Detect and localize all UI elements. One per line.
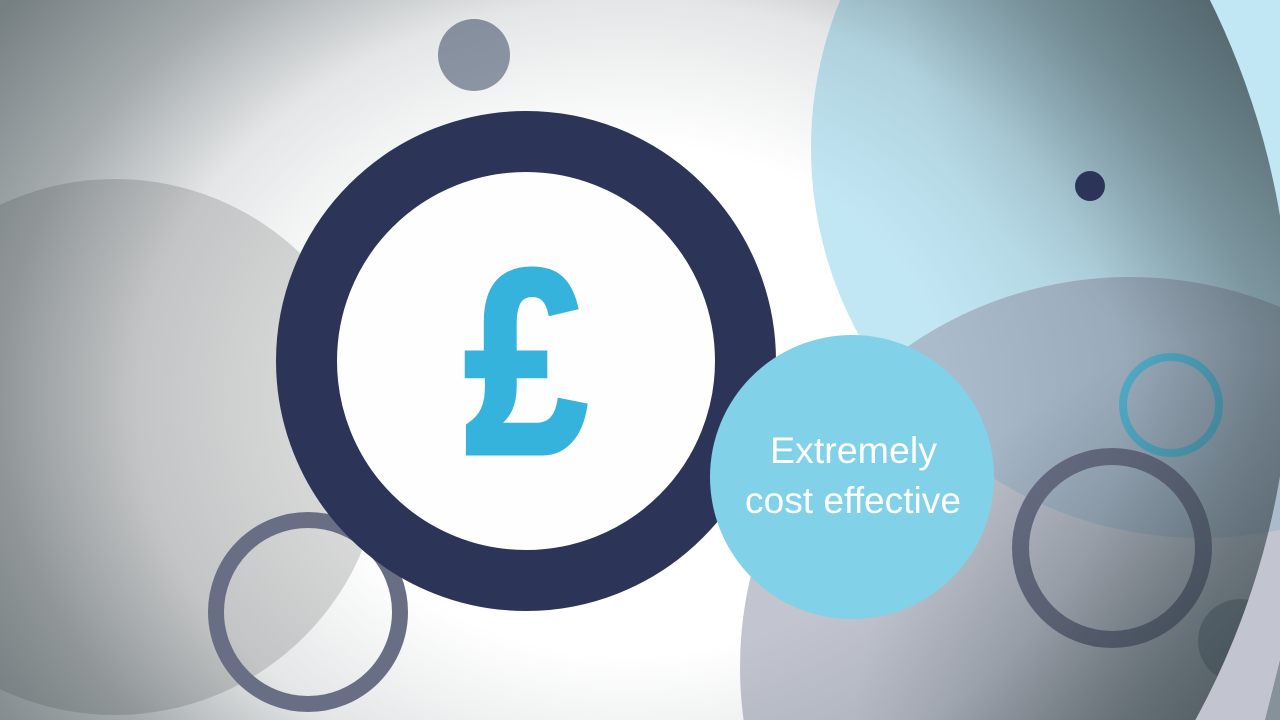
bottom right corner wedge xyxy=(1265,660,1280,720)
small shaded circle, far right xyxy=(1198,599,1248,676)
pound sign: £ xyxy=(465,216,587,508)
large light blue circle, top right xyxy=(811,0,1280,538)
callout circle: extremely cost effective: Extremely xyxy=(770,430,937,471)
callout circle: extremely cost effective: cost effective xyxy=(745,480,961,521)
outline ring, bottom left xyxy=(216,520,400,704)
navy dot xyxy=(1075,171,1105,201)
callout circle: extremely cost effective xyxy=(710,335,994,619)
outline ring, cyan right xyxy=(1123,357,1219,453)
large lavender circle, bottom right xyxy=(740,277,1280,720)
large grey circle, left xyxy=(0,179,383,715)
small grey-blue circle, top xyxy=(438,19,510,91)
outline ring, dark right xyxy=(1020,456,1204,640)
central navy ring xyxy=(306,142,746,580)
